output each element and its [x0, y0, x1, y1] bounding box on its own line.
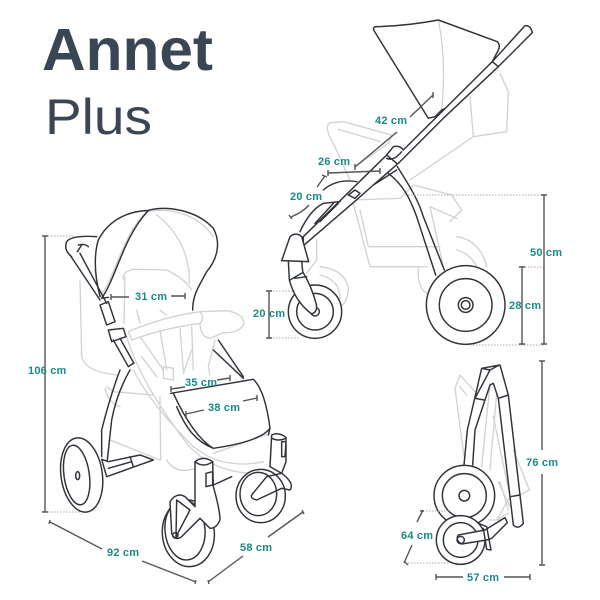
folded view — [434, 365, 529, 564]
labels: 76 cm — [526, 457, 558, 469]
dimension lines — [42, 92, 547, 584]
labels: 35 cm — [185, 377, 217, 389]
push bar and frame — [303, 26, 532, 246]
side view stroller — [282, 20, 532, 344]
title: Plus — [45, 89, 152, 145]
front wheel — [288, 285, 342, 338]
stroller front view — [56, 208, 291, 569]
title — [42, 17, 213, 145]
labels: 26 cm — [318, 156, 350, 168]
seat footrest — [171, 340, 270, 448]
labels: 20 cm — [290, 191, 322, 203]
right wheel — [236, 469, 285, 523]
rear leg — [388, 167, 444, 275]
labels: 106 cm — [28, 365, 67, 377]
labels: 57 cm — [467, 572, 499, 584]
labels: 64 cm — [401, 530, 433, 542]
rear axle — [102, 455, 153, 477]
front wheel — [160, 498, 217, 569]
canopy dark outline — [95, 208, 218, 310]
handle and frame — [66, 236, 134, 460]
canopy — [374, 20, 499, 118]
folded small wheel — [436, 516, 485, 564]
title: Annet — [42, 17, 213, 83]
labels: 50 cm — [530, 247, 562, 259]
labels: 31 cm — [135, 291, 167, 303]
left wheel — [56, 435, 107, 515]
labels — [28, 115, 562, 584]
front fork — [288, 261, 317, 314]
labels: 20 cm — [253, 308, 285, 320]
labels: 92 cm — [107, 547, 139, 559]
rear wheel — [426, 266, 505, 344]
folded frame — [464, 365, 523, 527]
folded big wheel — [434, 465, 495, 526]
labels: 38 cm — [208, 402, 240, 414]
labels: 28 cm — [509, 300, 541, 312]
labels: 42 cm — [375, 115, 407, 127]
labels: 58 cm — [240, 542, 272, 554]
